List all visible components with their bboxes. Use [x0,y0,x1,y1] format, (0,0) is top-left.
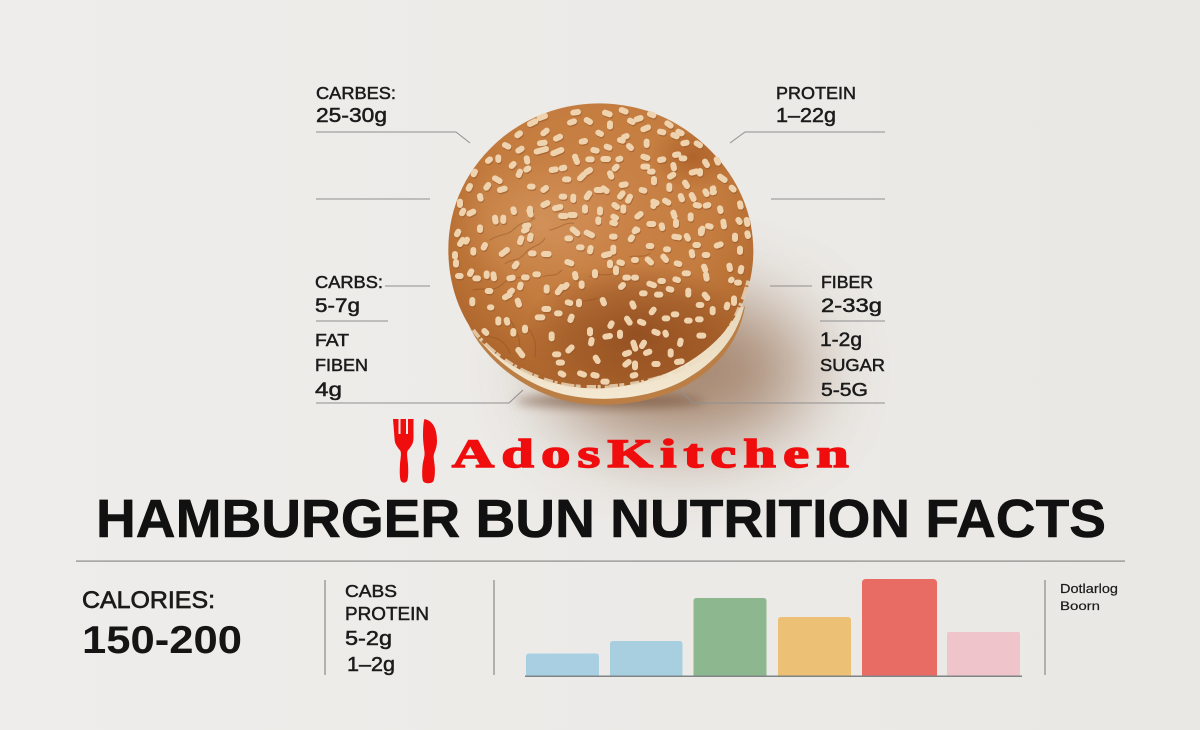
calories block: 150-200 [82,619,242,662]
callout: protein [730,83,885,143]
callout: left lower nutrients: 4g [315,379,342,401]
bun base with crumb [465,307,745,405]
callout: carbes [316,83,470,143]
callout: protein: PROTEIN [776,83,856,103]
callout: protein: 1–22g [776,105,836,127]
empty leader lines [316,198,885,200]
callout: right lower nutrients: 5-5G [821,379,868,400]
callout: left lower nutrients: 5-7g [315,295,360,317]
bun drop shadow [515,295,810,445]
callout: carbes: 25-30g [316,105,387,127]
macro list: CABS [345,581,397,601]
title: HAMBURGER BUN NUTRITION FACTS [96,489,1106,549]
macro list: PROTEIN [345,604,429,624]
macro list [345,581,429,676]
callout: left lower nutrients: CARBS: [315,272,383,292]
callout: left lower nutrients: FIBEN [315,355,368,375]
macro list: 1–2g [347,654,395,676]
callout: right lower nutrients: 2-33g [821,295,882,317]
callout: left lower nutrients: FAT [315,330,349,350]
legend text: Dotlarlog [1060,582,1118,596]
callout: left lower nutrients [315,272,523,403]
bar chart [525,579,1022,677]
brand name: AdosKitchen [452,431,856,476]
legend text [1060,582,1118,613]
calories block: CALORIES: [82,587,215,614]
calories block [82,587,242,662]
legend text: Boorn [1060,601,1100,613]
callout: carbes: CARBES: [316,83,396,103]
callout: right lower nutrients: 1-2g [820,329,862,351]
sesame seeds [455,110,749,383]
column dividers [325,580,1045,675]
macro list: 5-2g [345,628,392,650]
bun crown [448,103,753,388]
crumb fringe [473,277,749,387]
icon: fork and knife [393,419,437,483]
callout: right lower nutrients: FIBER [821,272,873,292]
crust shading and wrinkles [473,131,726,387]
callout: right lower nutrients [679,272,885,403]
hamburger bun illustration [448,103,753,405]
callout: right lower nutrients: SUGAR [820,355,885,375]
title rule [76,560,1125,562]
